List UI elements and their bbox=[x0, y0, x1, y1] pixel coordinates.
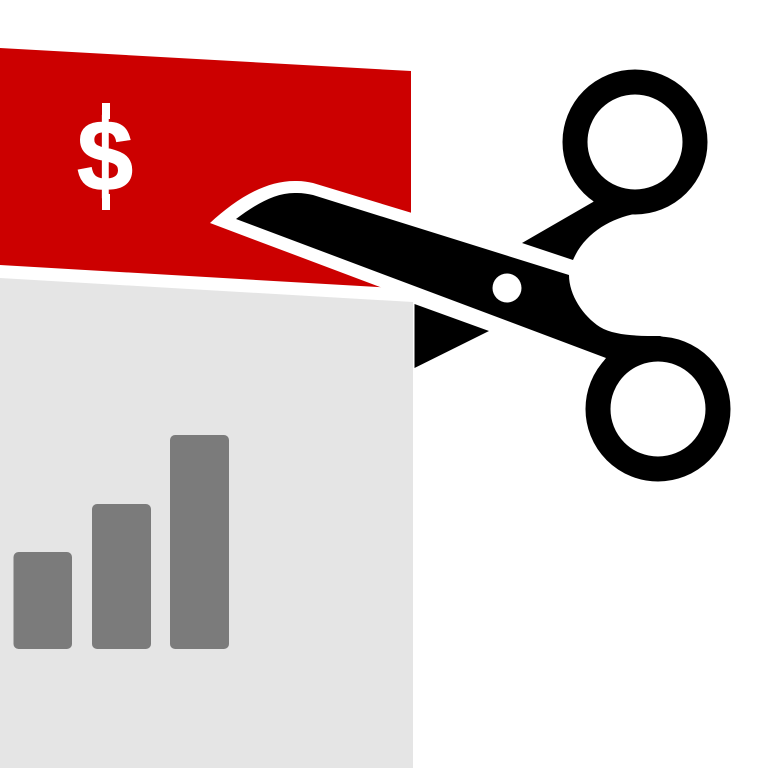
lower blade shank to upper handle bbox=[522, 170, 672, 260]
icon: scissors bbox=[210, 82, 718, 469]
upper handle ring bbox=[575, 82, 695, 202]
panel: grey document bbox=[0, 278, 413, 768]
lower blade tip bbox=[414, 304, 489, 368]
dollar sign: $ bbox=[77, 100, 133, 212]
upper blade bbox=[236, 193, 690, 390]
bar chart bbox=[14, 435, 229, 649]
panel: red strip being cut bbox=[0, 48, 411, 289]
white outline of upper blade bbox=[210, 181, 412, 301]
lower handle ring bbox=[598, 349, 718, 469]
pivot bbox=[492, 274, 522, 302]
